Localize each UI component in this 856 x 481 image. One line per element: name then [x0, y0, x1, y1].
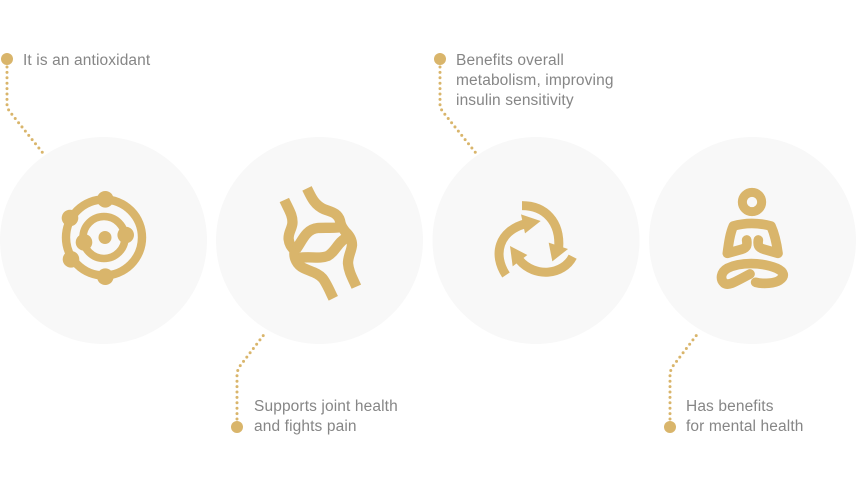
connector 1 — [1, 53, 44, 155]
label 4: for mental health — [686, 418, 804, 435]
label 2: Supports joint health — [254, 398, 398, 415]
connector 4 — [664, 332, 699, 433]
icon: joint — [284, 188, 356, 298]
connector 2 — [231, 332, 266, 433]
panel: mental health — [649, 137, 856, 435]
icon: recycling arrows — [499, 206, 573, 275]
label 2: and fights pain — [254, 418, 357, 435]
connector 3 — [434, 53, 478, 155]
icon: atom — [62, 191, 142, 285]
label 3: Benefits overall — [456, 52, 564, 69]
panel: antioxidant — [0, 52, 207, 344]
icon: meditation figure — [722, 192, 783, 284]
label 3: metabolism, improving — [456, 72, 614, 89]
background circle 3 — [432, 137, 640, 344]
label 3: insulin sensitivity — [456, 92, 574, 109]
background circle 4 — [649, 137, 856, 344]
label 4: Has benefits — [686, 398, 774, 415]
panel: joint health — [216, 137, 423, 435]
panel: metabolism — [432, 52, 640, 344]
background circle 1 — [0, 137, 207, 344]
label 1: It is an antioxidant — [23, 52, 151, 69]
background circle 2 — [216, 137, 423, 344]
